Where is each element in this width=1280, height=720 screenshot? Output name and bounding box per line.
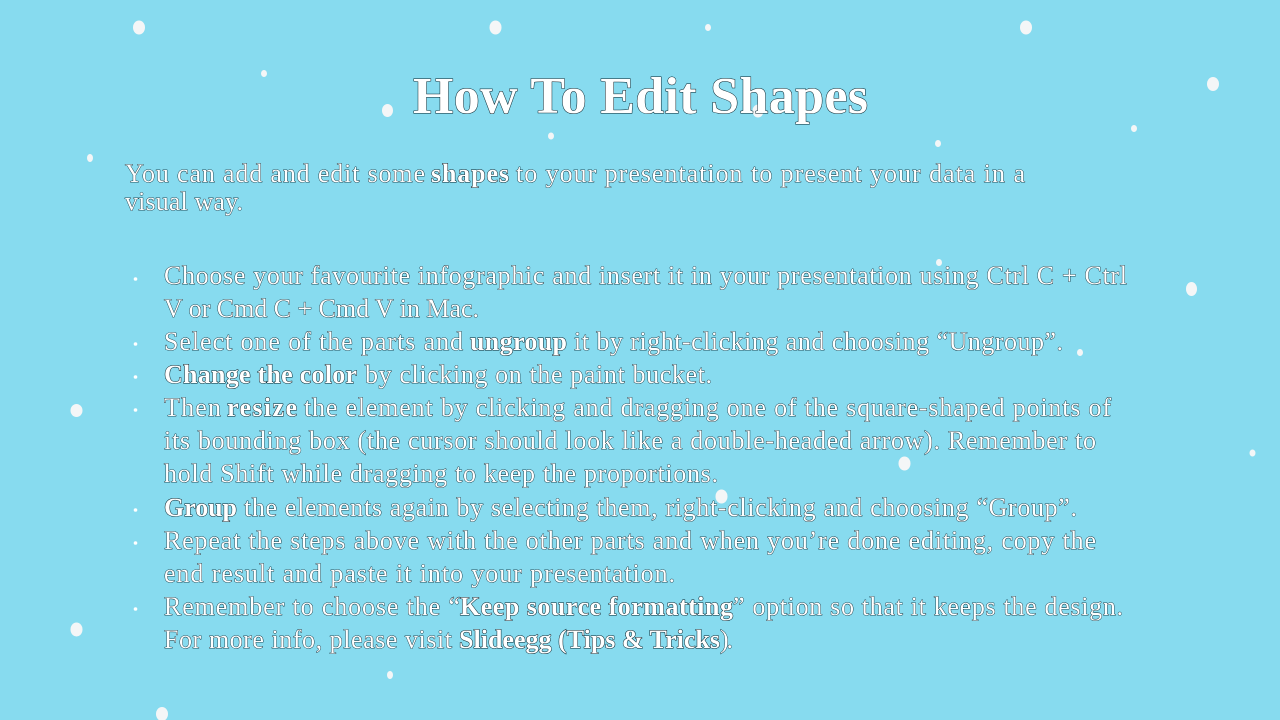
bullet: repeat: end result and paste it into your presentation. <box>164 559 675 588</box>
bullet: keep source formatting: For more info, please visit <box>164 625 453 654</box>
intro paragraph: to your presentation to present your data in a <box>516 159 1025 188</box>
bullet: resize: resize <box>227 393 297 422</box>
bullet: ungroup <box>134 327 1063 356</box>
bullet: change color: by clicking on the paint bucket. <box>365 360 712 389</box>
intro paragraph: visual way. <box>125 187 243 216</box>
bullet: group: Group <box>164 493 237 522</box>
bullet: resize: its bounding box (the cursor should look like a double-headed arrow). Remember to <box>164 426 1096 455</box>
bullet: group: the elements again by selecting them, right-clicking and choosing “Group”. <box>244 493 1077 522</box>
bullet: keep source formatting <box>134 592 1123 654</box>
bullet: resize: the element by clicking and dragging one of the square-shaped points of <box>304 393 1111 422</box>
intro paragraph: You can add and edit some <box>125 159 425 188</box>
bullet: change color <box>134 360 712 389</box>
bullet: ungroup: ungroup <box>470 327 567 356</box>
intro paragraph: shapes <box>431 159 509 188</box>
bullet: repeat <box>134 526 1096 588</box>
bullet: choose infographic: Choose your favourite infographic and insert it in your presentation using Ctrl C + Ctrl <box>164 261 1127 290</box>
bullet: keep source formatting: ). <box>720 625 733 654</box>
bullet: resize: hold Shift while dragging to keep the proportions. <box>164 459 718 488</box>
bullet: resize: Then <box>164 393 221 422</box>
bullet: choose infographic: V or Cmd C + Cmd V in Mac. <box>164 294 479 323</box>
title: How To Edit Shapes <box>413 68 868 125</box>
bullet: keep source formatting: Remember to choose the “ <box>164 592 460 621</box>
bullet: keep source formatting: Slideegg (Tips & Tricks <box>459 625 720 654</box>
bullet: repeat: Repeat the steps above with the other parts and when you’re done editing, copy the <box>164 526 1096 555</box>
intro paragraph <box>125 159 1025 216</box>
bullet: ungroup: it by right-clicking and choosing “Ungroup”. <box>574 327 1063 356</box>
bullet: resize <box>134 393 1111 488</box>
bullet: choose infographic <box>134 261 1127 323</box>
bullet: keep source formatting: ” option so that it keeps the design. <box>733 592 1123 621</box>
bullet: change color: Change the color <box>164 360 357 389</box>
bullet: ungroup: Select one of the parts and <box>164 327 463 356</box>
bullet list <box>134 261 1127 654</box>
bullet: keep source formatting: Keep source formatting <box>460 592 733 621</box>
